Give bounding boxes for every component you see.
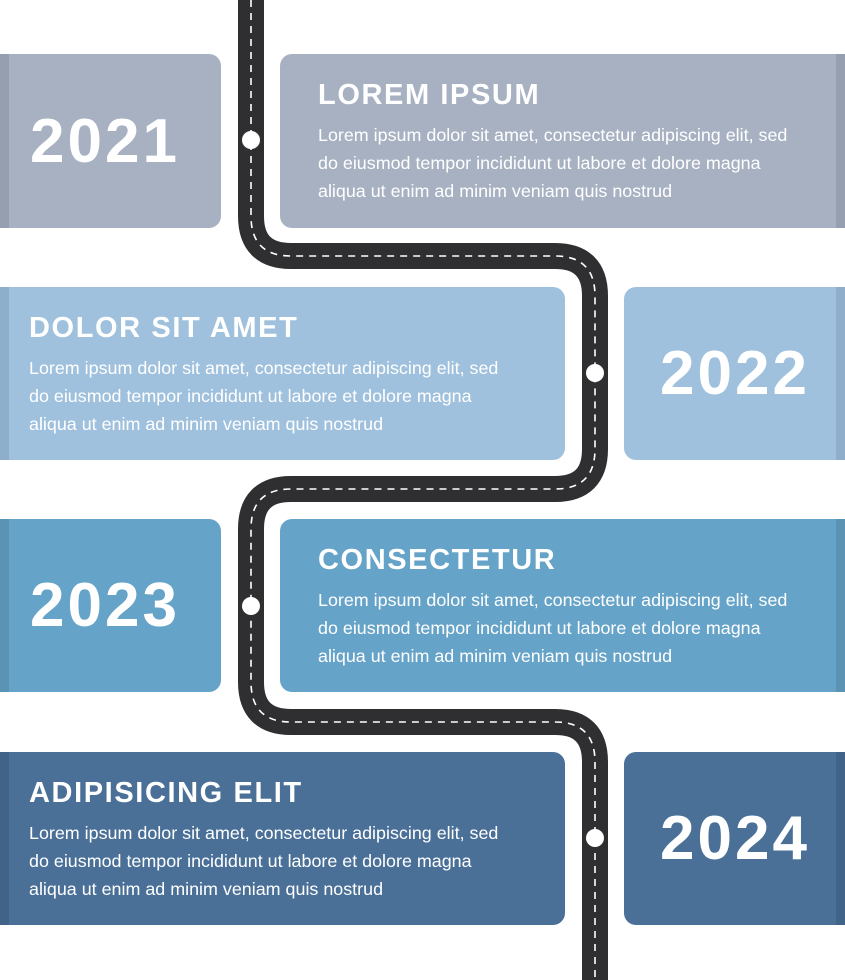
panel: lorem ipsum (280, 54, 845, 228)
panel: consectetur: do eiusmod tempor incididunt ut labore et dolore magna (318, 618, 761, 638)
panel: consectetur (280, 519, 845, 692)
panel: 2024 year: 2024 (660, 804, 810, 873)
panel: lorem ipsum: Lorem ipsum dolor sit amet, consectetur adipiscing elit, sed (318, 125, 787, 145)
panel: lorem ipsum: LOREM IPSUM (318, 79, 540, 111)
panel: dolor sit amet: DOLOR SIT AMET (29, 312, 298, 344)
panel: dolor sit amet: Lorem ipsum dolor sit amet, consectetur adipiscing elit, sed (29, 358, 498, 378)
panel: 2023 year (0, 519, 221, 692)
panel: adipisicing elit (0, 752, 565, 925)
panel: 2022 year: 2022 (660, 339, 810, 408)
panel: adipisicing elit: ADIPISICING ELIT (29, 777, 303, 809)
panel: 2023 year: 2023 (30, 571, 180, 640)
panel: dolor sit amet (0, 287, 565, 460)
panel: adipisicing elit: aliqua ut enim ad minim veniam quis nostrud (29, 879, 383, 899)
panel: consectetur: aliqua ut enim ad minim veniam quis nostrud (318, 646, 672, 666)
panel: dolor sit amet: aliqua ut enim ad minim veniam quis nostrud (29, 414, 383, 434)
panel: 2022 year (624, 287, 845, 460)
timeline dots (242, 131, 604, 847)
panel: consectetur: CONSECTETUR (318, 544, 556, 576)
panel: 2021 year (0, 54, 221, 228)
panel: 2021 year: 2021 (30, 106, 180, 176)
panel: lorem ipsum: aliqua ut enim ad minim veniam quis nostrud (318, 181, 672, 201)
panel: adipisicing elit: Lorem ipsum dolor sit amet, consectetur adipiscing elit, sed (29, 823, 498, 843)
panel: dolor sit amet: do eiusmod tempor incididunt ut labore et dolore magna (29, 386, 472, 406)
panel: adipisicing elit: do eiusmod tempor incididunt ut labore et dolore magna (29, 851, 472, 871)
panel: 2024 year (624, 752, 845, 925)
panel: consectetur: Lorem ipsum dolor sit amet, consectetur adipiscing elit, sed (318, 590, 787, 610)
panel: lorem ipsum: do eiusmod tempor incididunt ut labore et dolore magna (318, 153, 761, 173)
